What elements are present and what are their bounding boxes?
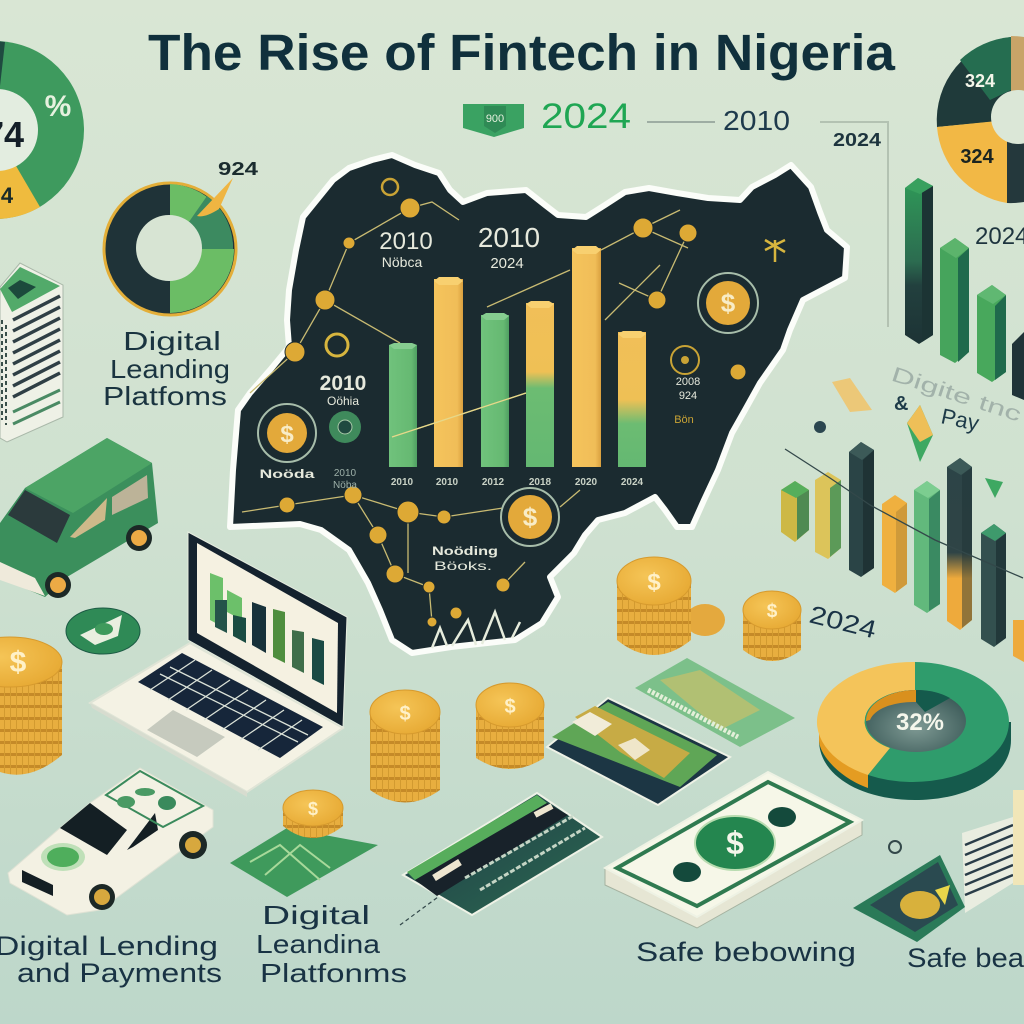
text: digital leandina platforms: [256, 900, 407, 988]
laptop: [90, 532, 347, 797]
text: digital lending platforms: Leanding: [110, 354, 230, 384]
map labels: Nöbca: [382, 254, 422, 270]
label: digital pay: Digite tnc: [888, 363, 1024, 426]
map coins: $: [280, 421, 294, 448]
map labels: 2010: [334, 468, 357, 479]
map bar chart: 2010: [436, 477, 459, 488]
building: [0, 263, 63, 442]
lower right bar chart: [781, 442, 1024, 662]
map labels: 924: [679, 390, 697, 402]
text: digital lending platforms: Digital: [123, 326, 221, 356]
coin stack small right: $: [767, 601, 778, 622]
map labels: Nöba: [333, 480, 357, 491]
map bar chart: 2012: [482, 477, 505, 488]
map bar chart: [389, 246, 646, 488]
dashed connector: [400, 897, 438, 925]
map bar chart: 2024: [621, 477, 644, 488]
map bar chart: 2018: [529, 477, 552, 488]
donut chart top left: 4: [1, 183, 14, 208]
text: digital lending platforms: Platfoms: [103, 381, 227, 411]
coin stack center left: [370, 690, 440, 802]
label: digital pay: [888, 363, 1024, 436]
map nodes: [279, 179, 746, 627]
timeline: 900: [486, 113, 504, 125]
text: digital leandina platforms: Leandina: [256, 929, 381, 959]
coin stack left: [0, 637, 62, 775]
map labels: 2010: [379, 228, 433, 255]
donut chart digital lending: 924: [218, 159, 258, 179]
label: digital pay: Pay: [939, 403, 981, 436]
map bar chart: 2020: [575, 477, 598, 488]
tablet card: [547, 698, 730, 805]
map labels: [260, 222, 700, 573]
donut chart top right: 324: [960, 146, 995, 168]
laptop screen: [197, 543, 338, 713]
pointer: [197, 178, 233, 216]
donut chart top left: [0, 41, 84, 219]
banknote stack: $: [726, 825, 744, 861]
coin stack center right: $: [647, 569, 661, 596]
text: digital lending and payments: and Payments: [17, 958, 222, 988]
donut chart top left: %: [45, 90, 71, 123]
chip card with coin: [230, 790, 378, 897]
credit card: [403, 793, 602, 915]
map labels: 2010: [320, 372, 366, 395]
text: safe be: Safe bea: [907, 943, 1024, 973]
timeline: [463, 97, 790, 137]
text: safe bebowing: Safe bebowing: [636, 937, 856, 967]
label: digital pay: &: [894, 393, 908, 415]
coin stack center: [476, 683, 544, 769]
text: digital leandina platforms: Digital: [262, 900, 370, 930]
map coins: $: [721, 288, 736, 318]
coin stack center: $: [504, 696, 516, 718]
text: digital lending and payments: Digital Lending: [0, 931, 218, 961]
small gold and green shapes: [814, 378, 1003, 498]
coin stack small right: [743, 591, 801, 661]
map labels: Noöda: [260, 467, 315, 481]
banknote stack: [605, 772, 862, 928]
laptop base: [90, 643, 343, 792]
network lines: [242, 202, 688, 622]
map labels: Oöhia: [327, 394, 359, 408]
donut chart digital lending: [104, 159, 258, 315]
axis label 2024: [820, 122, 888, 327]
donut chart bottom right: 32%: [896, 709, 944, 736]
map coins: [258, 240, 785, 546]
green banknote card: [635, 658, 795, 747]
map labels: Noöding: [432, 544, 498, 558]
map labels: 2010: [478, 222, 540, 253]
coin stack center right: [617, 557, 725, 655]
money pile right: [853, 790, 1024, 942]
coin stack left: $: [10, 646, 27, 679]
laptop trackpad: [147, 710, 225, 757]
map labels: 2008: [676, 376, 700, 388]
green van: [0, 438, 158, 598]
map grass: [432, 612, 520, 648]
coin stack center left: $: [399, 703, 411, 725]
donut chart bottom right: [817, 662, 1011, 800]
text: digital lending platforms: [103, 326, 230, 411]
text: digital lending and payments: [0, 931, 222, 988]
white car: [8, 768, 213, 915]
axis label 2024: 2024: [833, 130, 881, 150]
timeline: 2010: [723, 105, 790, 136]
map coins: $: [523, 502, 538, 532]
year label 2024 right: 2024: [807, 601, 879, 644]
map labels: Böoks.: [434, 559, 492, 573]
nigeria map: [230, 155, 847, 653]
green badge: [66, 608, 140, 654]
text: digital leandina platforms: Platfonms: [260, 958, 407, 988]
title: The Rise of Fintech in Nigeria: [148, 24, 896, 81]
top right bar chart: [905, 178, 1024, 400]
map labels: 2024: [490, 255, 524, 272]
timeline: 2024: [541, 97, 631, 136]
map bar chart: 2010: [391, 477, 414, 488]
map labels: Bön: [674, 414, 694, 426]
chip card with coin: $: [308, 799, 318, 819]
donut chart top right: [937, 36, 1024, 203]
donut chart top right: 324: [965, 71, 995, 91]
laptop keyboard: [138, 653, 323, 758]
